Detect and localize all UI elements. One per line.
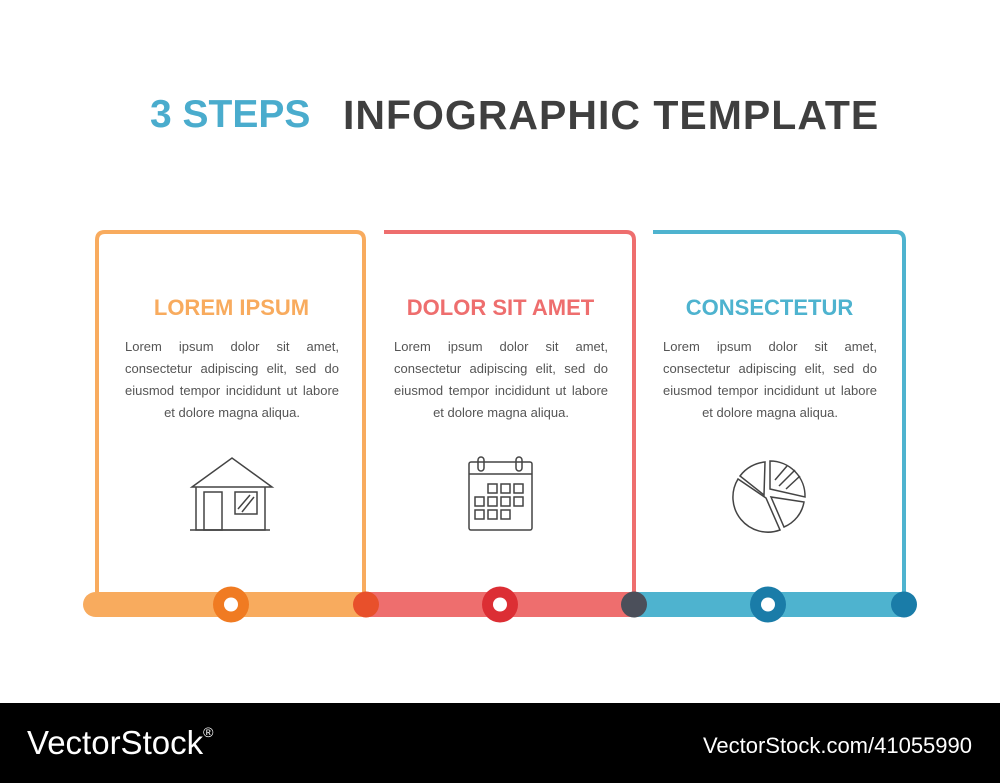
icon: house	[190, 458, 272, 530]
text 3: Lorem ipsum dolor sit amet, consectetur adipiscing elit, sed do eiusmod tempor incididunt ut labore et dolore magna aliqua.	[663, 339, 877, 420]
icon: pie chart	[733, 461, 805, 532]
footer url: VectorStock.com/41055990	[703, 733, 972, 758]
heading: dolor sit amet: DOLOR SIT AMET	[407, 295, 594, 320]
text 1: Lorem ipsum dolor sit amet, consectetur adipiscing elit, sed do eiusmod tempor incididunt ut labore et dolore magna aliqua.	[125, 339, 339, 420]
panel frame: blue	[653, 232, 904, 604]
heading: lorem ipsum: LOREM IPSUM	[154, 295, 309, 320]
text 2: Lorem ipsum dolor sit amet, consectetur adipiscing elit, sed do eiusmod tempor incididunt ut labore et dolore magna aliqua.	[394, 339, 608, 420]
timeline bar	[83, 586, 917, 622]
heading: consectetur: CONSECTETUR	[686, 295, 853, 320]
icon: calendar	[469, 457, 532, 530]
title: INFOGRAPHIC TEMPLATE	[343, 92, 879, 138]
panel frame: orange	[97, 232, 364, 604]
footer band	[0, 703, 1000, 783]
footer logo: VectorStock®	[27, 724, 213, 761]
panel frame: red	[384, 232, 634, 604]
title: 3 STEPS	[150, 93, 310, 136]
